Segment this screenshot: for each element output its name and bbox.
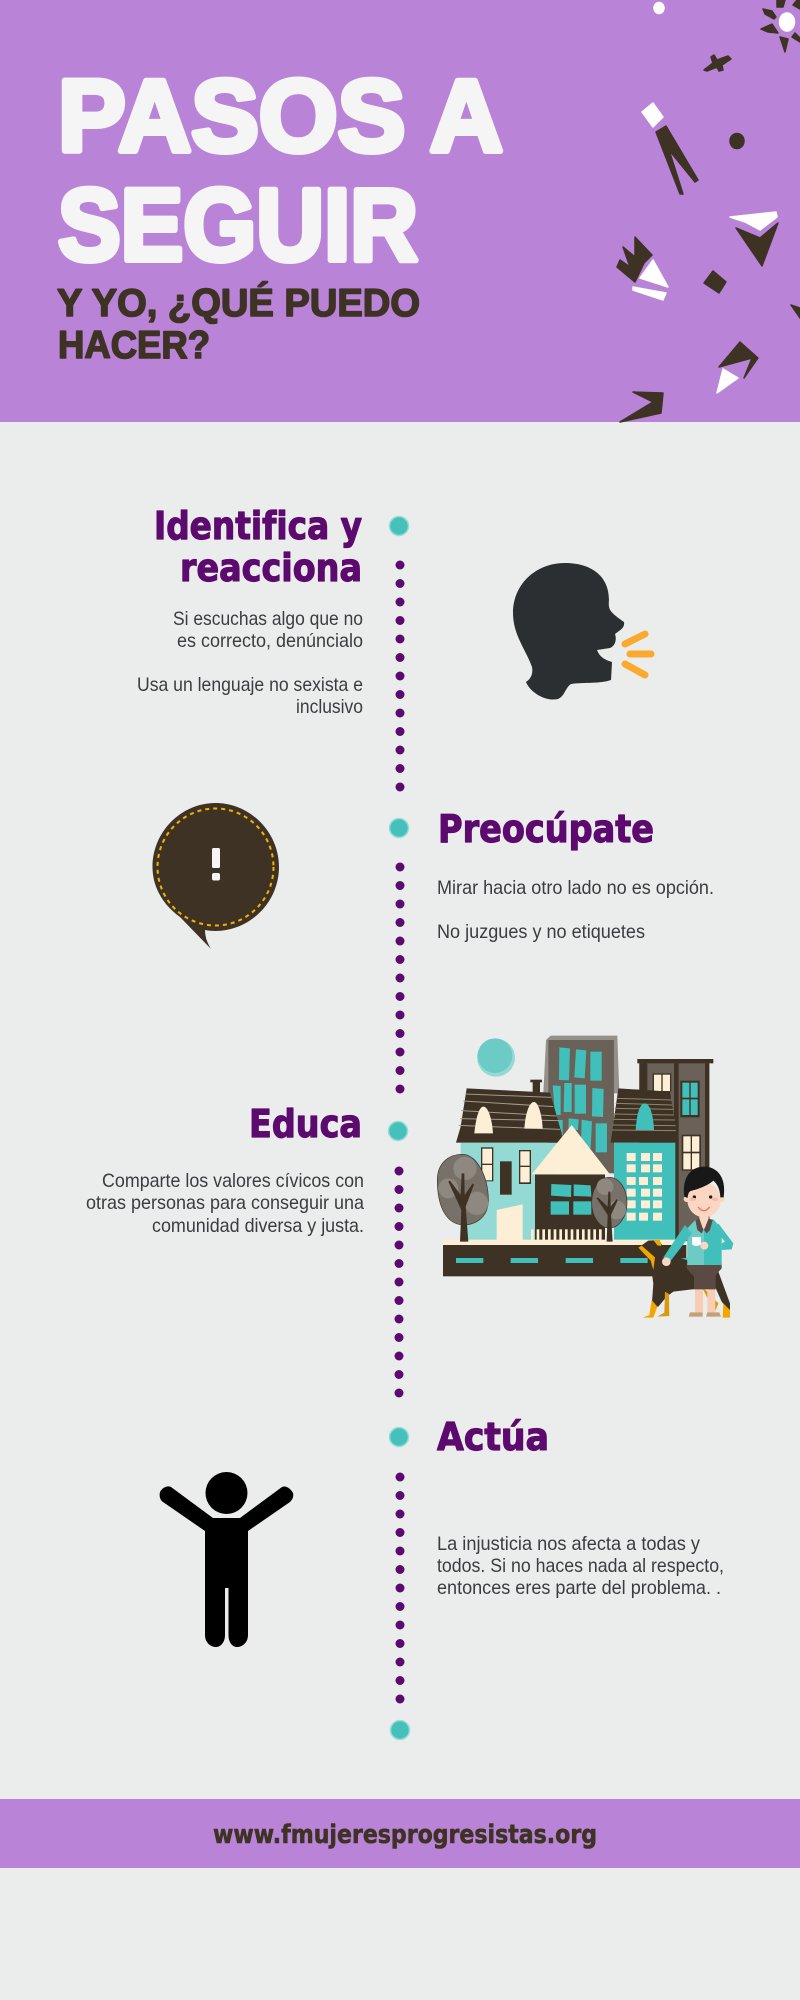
left house [456, 1080, 562, 1240]
text block: otras personas para conseguir una [86, 1192, 364, 1214]
subtitle: HACER? [58, 324, 210, 367]
panel: header [0, 0, 800, 422]
title: SEGUIR [58, 168, 418, 282]
heading: reacciona [180, 546, 362, 590]
text block: entonces eres parte del problema. . [437, 1577, 721, 1599]
text block: Usa un lenguaje no sexista e [137, 674, 363, 696]
heading: Educa [249, 1102, 362, 1146]
text block: es correcto, denúncialo [177, 630, 363, 652]
person [662, 1167, 733, 1317]
panel: educa [86, 1102, 364, 1237]
panel: identifica y reacciona [137, 504, 363, 718]
trees [437, 1154, 627, 1242]
right house [611, 1088, 677, 1240]
subtitle: Y YO, ¿QUÉ PUEDO [57, 281, 420, 325]
heading [154, 504, 362, 590]
heading: Preocúpate [438, 807, 654, 851]
timeline [388, 516, 410, 1740]
text block: Mirar hacia otro lado no es opción. [437, 877, 714, 899]
text block: todos. Si no haces nada al respecto, [437, 1555, 724, 1577]
text block [86, 1170, 364, 1237]
panel: preocúpate [437, 807, 714, 943]
website url: www.fmujeresprogresistas.org [213, 1820, 597, 1850]
text block: comunidad diversa y justa. [152, 1215, 364, 1237]
road [443, 1240, 688, 1276]
tall building [543, 1036, 619, 1173]
sun [477, 1038, 515, 1077]
icon: speaking head [513, 563, 651, 700]
illustration: city street with person and dog [437, 1036, 733, 1318]
title: PASOS A [58, 59, 503, 173]
dog [638, 1240, 730, 1318]
text block: No juzgues y no etiquetes [437, 921, 645, 943]
text block [437, 1533, 724, 1599]
text block [437, 877, 714, 943]
panel: footer band [0, 1799, 800, 1868]
decorative confetti shapes [617, 0, 800, 422]
subtitle [57, 281, 420, 367]
title [58, 59, 503, 282]
center house [531, 1125, 610, 1240]
text block [137, 608, 363, 718]
text block: La injusticia nos afecta a todas y [437, 1533, 700, 1555]
right tower [637, 1059, 713, 1241]
heading: Identifica y [154, 504, 362, 548]
icon: person with raised arms [160, 1472, 293, 1647]
text block: inclusivo [296, 696, 363, 718]
heading: Actúa [437, 1415, 549, 1459]
text block: Comparte los valores cívicos con [102, 1170, 364, 1192]
icon: speech bubble with exclamation [152, 803, 279, 949]
panel: actúa [437, 1415, 724, 1599]
text block: Si escuchas algo que no [173, 608, 363, 630]
